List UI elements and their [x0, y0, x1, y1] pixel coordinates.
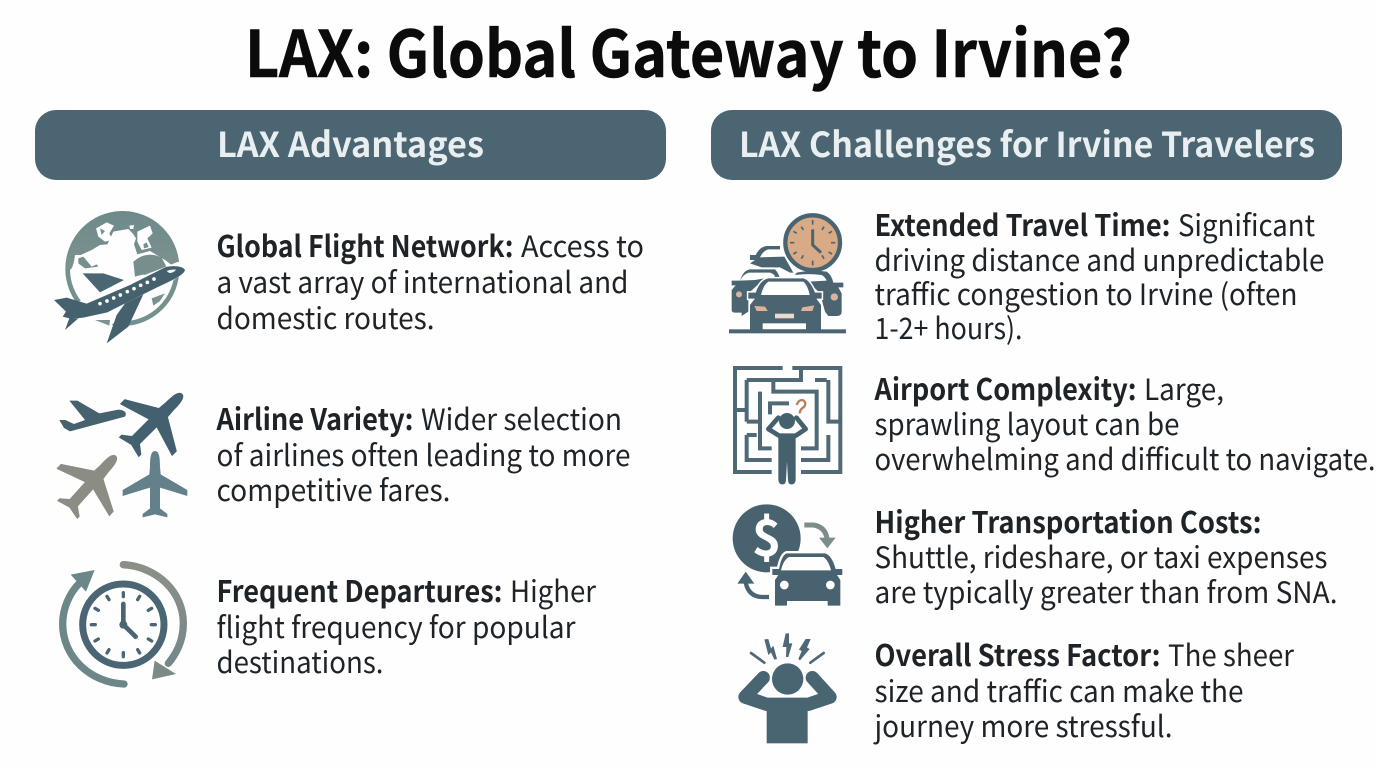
- text block: Higher Transportation Costs: Higher Transportation Costs:: [874, 500, 1262, 542]
- text block: Extended Travel Time: traffic congestion to Irvine (often: [874, 272, 1298, 314]
- text block: Frequent Departures: Higher: [510, 569, 597, 611]
- text block: Airline Variety: Wider selection: [421, 397, 622, 439]
- text block: Airline Variety: Airline Variety:: [216, 397, 414, 439]
- text block: Higher Transportation Costs: Shuttle, rideshare, or taxi expenses: [874, 535, 1328, 577]
- text block: Overall Stress Factor: journey more stressful.: [873, 704, 1172, 746]
- icon: four airplanes: [41, 368, 208, 534]
- text block: Airline Variety: competitive fares.: [216, 468, 450, 510]
- icon: stressed person: [745, 633, 830, 743]
- text block: Global Flight Network: [216, 224, 644, 338]
- text block: Frequent Departures: flight frequency for popular: [216, 605, 576, 647]
- text block: Extended Travel Time: driving distance and unpredictable: [874, 238, 1324, 280]
- text block: Frequent Departures: destinations.: [216, 640, 384, 682]
- icon: globe with airplane: [54, 211, 190, 343]
- icon: person in maze: [735, 368, 840, 485]
- text block: Airport Complexity: Large,: [1144, 367, 1224, 409]
- text block: Higher Transportation Costs: [874, 500, 1338, 612]
- text block: Airline Variety: [216, 397, 631, 510]
- panel heading: LAX Advantages: LAX Advantages: [217, 117, 484, 167]
- icon: dollar coin and car: [733, 499, 842, 606]
- panel heading: LAX Advantages: [35, 110, 666, 180]
- text block: Overall Stress Factor: size and traffic can make the: [874, 669, 1244, 711]
- text block: Extended Travel Time: 1-2+ hours).: [874, 306, 1022, 348]
- text block: Overall Stress Factor: The sheer: [1168, 633, 1295, 675]
- text block: Airport Complexity: sprawling layout can be: [874, 402, 1180, 444]
- text block: Global Flight Network: domestic routes.: [216, 296, 434, 338]
- text block: Overall Stress Factor: Overall Stress Factor:: [874, 633, 1160, 675]
- text block: Global Flight Network: Access to: [521, 224, 644, 266]
- title: LAX: Global Gateway to Irvine?: [245, 4, 1132, 96]
- text block: Frequent Departures: [216, 569, 597, 682]
- text block: Airport Complexity: [874, 367, 1376, 479]
- text block: Extended Travel Time: [874, 203, 1324, 348]
- text block: Frequent Departures: Frequent Departures:: [216, 569, 502, 611]
- icon: dollar coin and car: $: [752, 499, 781, 571]
- icon: traffic jam with clock: [729, 215, 846, 333]
- text block: Overall Stress Factor: [873, 633, 1295, 746]
- text block: Global Flight Network: a vast array of international and: [216, 260, 628, 302]
- text block: Higher Transportation Costs: are typically greater than from SNA.: [874, 570, 1338, 612]
- text block: Airport Complexity: Airport Complexity:: [874, 367, 1136, 409]
- text block: Global Flight Network: Global Flight Network:: [216, 224, 514, 266]
- panel heading: LAX Challenges for Irvine Travelers: LAX Challenges for Irvine Travelers: [739, 117, 1315, 167]
- text block: Airline Variety: of airlines often leading to more: [216, 433, 630, 475]
- icon: clock with circular arrows: [63, 565, 183, 684]
- text block: Extended Travel Time: Extended Travel Time:: [874, 203, 1170, 245]
- text block: Extended Travel Time: Significant: [1178, 203, 1315, 245]
- panel heading: LAX Challenges for Irvine Travelers: [711, 110, 1342, 180]
